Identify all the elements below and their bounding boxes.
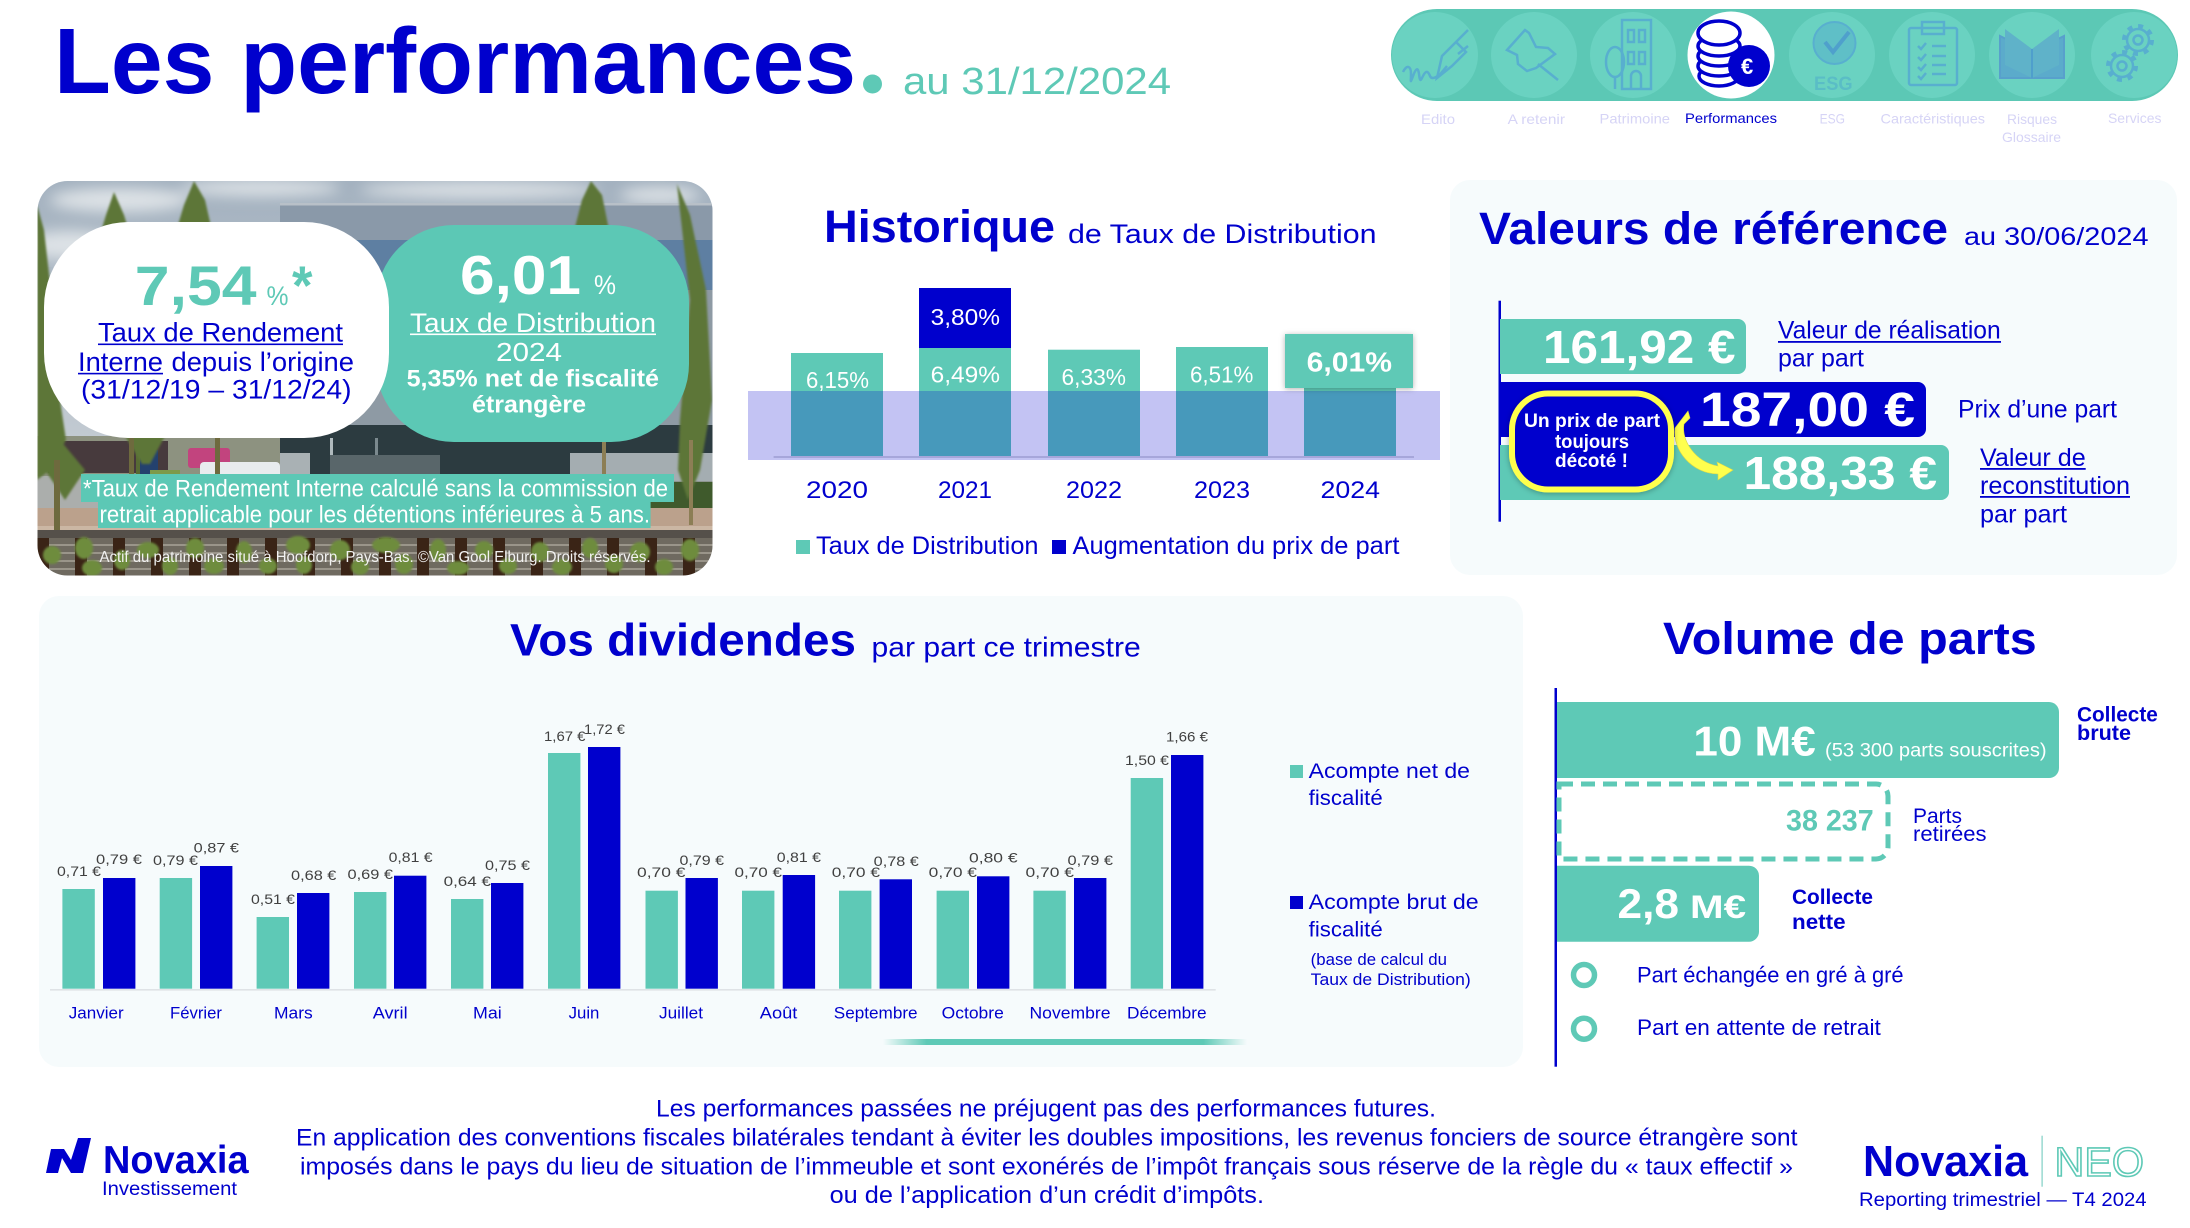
value labels: 0,79 €: [680, 852, 724, 868]
heading: de Taux de Distribution: [1068, 219, 1376, 249]
callout: [1512, 394, 1671, 490]
heading: [824, 201, 1376, 252]
logo: Novaxia NEO: Novaxia: [1863, 1137, 2029, 1186]
value labels: 0,70 €: [929, 864, 977, 880]
value labels: 0,80 €: [969, 850, 1018, 866]
heading: Vos dividendes: [510, 615, 856, 666]
value labels: 0,87 €: [194, 840, 239, 856]
panel: volume de parts: [1554, 613, 2158, 1067]
bar: collecte nette: [1557, 866, 1873, 942]
bar chart: 2023: [1194, 477, 1250, 504]
photo of building: [20, 180, 713, 576]
bar: collecte brute: (53 300 parts souscrites): [1825, 741, 2047, 762]
value labels: 1,72 €: [584, 721, 625, 737]
bar chart: 3,80%: [931, 304, 1000, 330]
bar chart: 6,49%: [931, 362, 1000, 388]
value labels: 0,71 €: [57, 863, 101, 879]
legend: Augmentation du prix de part: [1072, 532, 1399, 560]
bar: collecte nette: Collecte: [1792, 886, 1873, 909]
bar chart: 2024: [1320, 477, 1380, 504]
legend: [1290, 760, 1479, 989]
value labels: 0,70 €: [1026, 864, 1074, 880]
value labels: 0,81 €: [389, 849, 433, 865]
navigation labels: Services: [2108, 110, 2162, 126]
bar chart: 2022: [1066, 477, 1122, 504]
icon: gears: [2108, 26, 2152, 80]
heading: Valeurs de référence: [1479, 203, 1948, 254]
panel: valeurs de référence: [1450, 180, 2177, 575]
bar: valeur de reconstitution: [1500, 444, 2130, 529]
navigation labels: Edito: [1421, 111, 1455, 127]
card: taux de distribution: étrangère: [472, 392, 586, 419]
heading: Volume de parts: [1663, 613, 2037, 664]
icon: push pin: [1507, 30, 1558, 80]
bar: valeur de reconstitution: Valeur de: [1980, 444, 2086, 472]
month labels: [69, 1005, 1207, 1023]
value labels: 0,78 €: [874, 853, 919, 869]
card: taux de rendement interne: [44, 222, 389, 438]
footer disclaimer: imposés dans le pays du lieu de situation de l’immeuble et sont exonérés de l’impôt français sous réserve de la règle du « taux effectif »: [300, 1154, 1793, 1180]
heading: [1479, 203, 2149, 254]
value labels: [57, 721, 1208, 907]
month labels: Novembre: [1030, 1005, 1110, 1023]
card: taux de distribution: %: [594, 270, 616, 300]
bar: prix d'une part: 187,00 €: [1700, 384, 1915, 437]
panel: historique: [748, 201, 1440, 560]
part en attente: Part en attente de retrait: [1637, 1015, 1881, 1040]
month labels: Octobre: [942, 1005, 1004, 1023]
bar: parts retirées: 38 237: [1786, 805, 1874, 838]
icon: ESG check: ESG: [1814, 74, 1853, 95]
legend: Acompte net de: [1309, 760, 1470, 783]
icon: book: [2000, 29, 2064, 78]
legend: Acompte brut de: [1309, 891, 1479, 914]
month labels: Août: [760, 1005, 798, 1023]
value labels: 0,81 €: [777, 849, 821, 865]
value labels: 0,75 €: [485, 857, 530, 873]
footnote: retrait applicable pour les détentions inférieures à 5 ans.: [100, 502, 650, 529]
bar chart: [748, 288, 1440, 504]
value labels: 0,79 €: [96, 851, 142, 867]
bar chart: [50, 721, 1216, 1023]
value labels: 0,70 €: [637, 864, 686, 880]
panel: photo with key rates: [20, 180, 713, 576]
bar: parts retirées: Parts: [1913, 805, 1962, 828]
bar: collecte brute: brute: [2077, 722, 2131, 745]
callout: toujours: [1555, 432, 1629, 453]
logo: Novaxia Investissement: [46, 1138, 249, 1200]
logo: Novaxia NEO: Reporting trimestriel — T4 2024: [1859, 1190, 2147, 1211]
bar: valeur de réalisation: 161,92 €: [1543, 321, 1736, 373]
icon: ESG check: [1814, 22, 1856, 95]
card: taux de rendement interne: *: [292, 254, 313, 316]
navigation labels: Caractéristiques: [1880, 110, 1985, 126]
footnote: *Taux de Rendement Interne calculé sans la commission de: [83, 476, 668, 503]
footnote: [81, 474, 674, 529]
navigation labels: Glossaire: [2002, 129, 2061, 145]
footer disclaimer: ou de l’application d’un crédit d’impôts.: [830, 1182, 1264, 1209]
heading: Historique: [824, 201, 1055, 252]
value labels: 0,79 €: [153, 852, 198, 868]
bar chart: 2021: [938, 477, 992, 504]
card: taux de distribution: 5,35% net de fiscalité: [407, 366, 659, 393]
bar: valeur de réalisation: Valeur de réalisation: [1778, 317, 2001, 345]
bar chart: 2020: [806, 477, 868, 504]
title: Les performances: [54, 9, 856, 113]
icon: edito pen: [1403, 30, 1468, 81]
part échangée: Part échangée en gré à gré: [1637, 963, 1904, 988]
bar: collecte brute: [1557, 702, 2158, 778]
bar: prix d'une part: Prix d’une part: [1958, 396, 2117, 424]
footer disclaimer: [296, 1096, 1798, 1209]
bar: valeur de reconstitution: 188,33 €: [1744, 447, 1937, 499]
footer disclaimer: Les performances passées ne préjugent pas des performances futures.: [656, 1096, 1436, 1122]
heading: par part ce trimestre: [872, 632, 1141, 663]
value labels: 0,69 €: [348, 866, 393, 882]
month labels: Juillet: [659, 1005, 703, 1023]
icon: stack of coins with euro: €: [1741, 54, 1753, 79]
card: taux de rendement interne: Taux de Rendement: [98, 318, 344, 348]
bar: collecte nette: 2,8: [1618, 880, 1679, 927]
legend: fiscalité: [1309, 787, 1383, 810]
bar chart: 6,15%: [806, 367, 869, 393]
month labels: Septembre: [834, 1005, 918, 1023]
bar: valeur de reconstitution: par part: [1980, 501, 2067, 529]
icon: building and tree: [1606, 20, 1651, 89]
photo credit: Actif du patrimoine situé à Hoofdorp, Pays-Bas. ©Van Gool Elburg. Droits réservés.: [100, 549, 650, 566]
logo: Novaxia NEO: NEO: [2054, 1139, 2144, 1185]
month labels: Avril: [373, 1005, 408, 1023]
bar: parts retirées: [1559, 784, 1986, 859]
bar: valeur de réalisation: par part: [1778, 345, 1864, 373]
legend: Taux de Distribution: [816, 532, 1038, 560]
month labels: Février: [170, 1005, 223, 1023]
heading: au 30/06/2024: [1964, 223, 2149, 251]
month labels: Mars: [274, 1005, 313, 1023]
bar chart: 6,01%: [1307, 347, 1392, 378]
card: taux de rendement interne: depuis l’origine: [172, 347, 354, 377]
value labels: 0,68 €: [291, 867, 337, 883]
bar chart: 6,51%: [1190, 362, 1253, 388]
footer disclaimer: En application des conventions fiscales bilatérales tendant à éviter les doubles impositions, les revenus fonciers de source étrangère sont: [296, 1124, 1798, 1152]
bar: prix d'une part: [1500, 382, 2117, 437]
legend: (base de calcul du: [1311, 951, 1447, 969]
icon: stack of coins with euro: [1698, 21, 1770, 87]
bar: valeur de reconstitution: reconstitution: [1980, 472, 2130, 500]
navigation bar: [1391, 9, 2178, 145]
navigation labels: Performances: [1685, 110, 1777, 126]
value labels: 1,66 €: [1166, 729, 1208, 745]
bar: collecte nette: nette: [1792, 911, 1846, 934]
legend: [796, 532, 1399, 560]
value labels: 0,79 €: [1068, 852, 1113, 868]
value labels: 1,50 €: [1125, 752, 1169, 768]
bar: valeur de réalisation: [1500, 317, 2001, 374]
card: taux de distribution: Taux de Distribution: [410, 308, 656, 338]
title: au 31/12/2024: [903, 61, 1171, 103]
logo: Novaxia NEO: [1859, 1136, 2147, 1211]
icon: clipboard: [1909, 22, 1957, 85]
navigation labels: A retenir: [1508, 111, 1565, 127]
value labels: 0,51 €: [251, 891, 295, 907]
heading: [510, 615, 1141, 666]
logo: Novaxia Investissement: Novaxia: [103, 1139, 249, 1182]
logo: Novaxia Investissement: Investissement: [102, 1179, 238, 1200]
legend: Taux de Distribution): [1311, 971, 1471, 989]
month labels: Mai: [473, 1005, 502, 1023]
card: taux de rendement interne: Interne: [78, 347, 163, 377]
card: taux de rendement interne: %: [266, 281, 288, 311]
bar: parts retirées: retirées: [1913, 823, 1986, 846]
callout: décoté !: [1555, 451, 1628, 472]
month labels: Juin: [569, 1005, 599, 1023]
navigation labels: Patrimoine: [1600, 110, 1670, 126]
card: taux de rendement interne: (31/12/19 – 31/12/24): [81, 375, 352, 405]
value labels: 1,67 €: [544, 728, 586, 744]
arrow: [1675, 411, 1733, 480]
bar: collecte brute: Collecte: [2077, 704, 2158, 727]
bar: collecte nette: M€: [1690, 889, 1746, 925]
month labels: Décembre: [1127, 1005, 1207, 1023]
callout: Un prix de part: [1524, 411, 1661, 432]
bar: collecte brute: 10 M€: [1693, 718, 1816, 765]
month labels: Janvier: [69, 1005, 124, 1023]
bar chart: 6,33%: [1062, 364, 1126, 390]
card: taux de rendement interne: 7,54: [135, 254, 256, 317]
navigation labels: [1421, 110, 2162, 145]
navigation labels: ESG: [1820, 110, 1845, 126]
navigation labels: Risques: [2007, 111, 2057, 127]
card: taux de distribution: 2024: [496, 337, 562, 367]
panel: vos dividendes: [39, 596, 1523, 1067]
card: taux de distribution: [376, 225, 689, 442]
legend: fiscalité: [1309, 919, 1383, 942]
value labels: 0,64 €: [444, 873, 491, 889]
card: taux de distribution: 6,01: [460, 244, 581, 306]
value labels: 0,70 €: [832, 864, 880, 880]
value labels: 0,70 €: [734, 864, 782, 880]
